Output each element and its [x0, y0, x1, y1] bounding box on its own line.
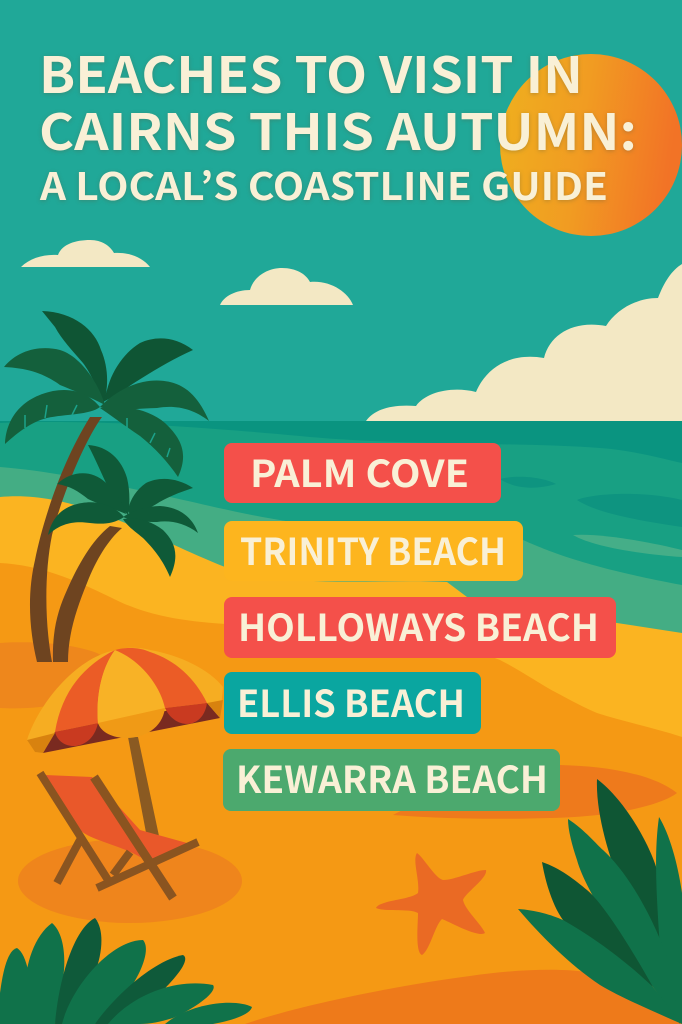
- starfish: [376, 853, 486, 955]
- sand mound bottom right: [245, 970, 682, 1024]
- cloud: middle: [220, 268, 353, 305]
- label: Holloways Beach: HOLLOWAYS BEACH: [238, 598, 599, 652]
- shadow: chair: [18, 839, 242, 923]
- label: Trinity Beach: TRINITY BEACH: [240, 522, 506, 576]
- sand: main orange: [0, 563, 682, 1024]
- title line 1: BEACHES TO VISIT IN: [39, 36, 583, 108]
- label: Ellis Beach: ELLIS BEACH: [237, 674, 465, 728]
- title line 2: CAIRNS THIS AUTUMN:: [39, 93, 637, 165]
- sand: yellow band: [0, 496, 682, 1024]
- cloud: right: [366, 264, 682, 421]
- sea: [0, 421, 682, 660]
- sky background: [0, 0, 682, 425]
- label: Palm Cove: [224, 443, 501, 503]
- beach umbrella: [27, 648, 223, 838]
- deck chair: [40, 773, 198, 898]
- cloud: left: [21, 240, 150, 267]
- plant: bottom right: [518, 779, 682, 1024]
- title: [39, 36, 637, 211]
- sand mound under palms: [0, 642, 113, 708]
- palm tree: large: [4, 311, 209, 662]
- label: Kewarra Beach: KEWARRA BEACH: [236, 750, 548, 804]
- sun: [500, 54, 682, 236]
- palm tree: small: [48, 445, 198, 662]
- plant: bottom left: [0, 918, 252, 1024]
- subtitle: A LOCAL’S COASTLINE GUIDE: [39, 156, 608, 211]
- shadow: right: [393, 765, 677, 819]
- label: Palm Cove: PALM COVE: [250, 444, 469, 498]
